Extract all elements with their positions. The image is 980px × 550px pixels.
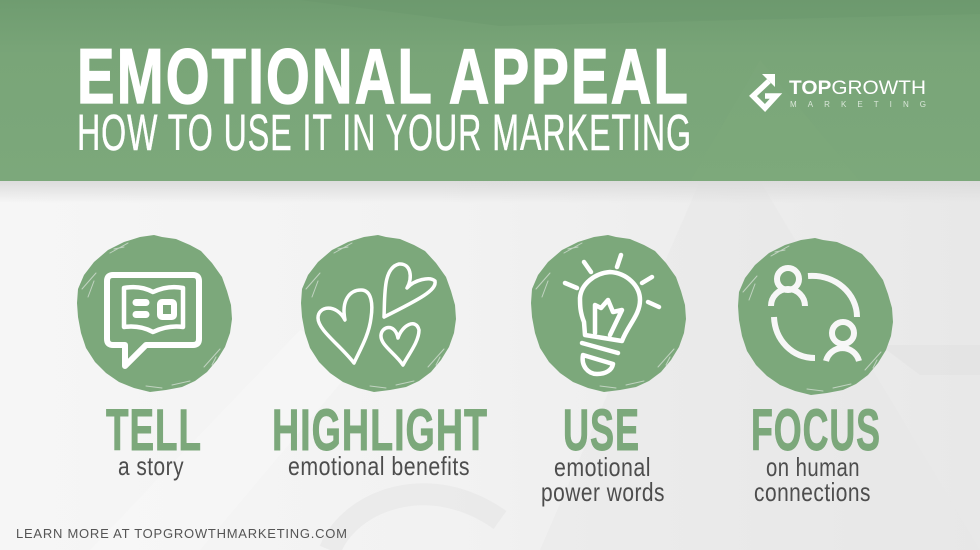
panel: tell a story [77,235,232,481]
caption: power words [541,477,665,507]
icon: connected people [771,268,859,361]
heading: HIGHLIGHT [272,398,488,463]
title: EMOTIONAL APPEAL [77,32,690,120]
caption: a story [118,451,184,481]
caption: on human [766,452,860,482]
logo wordmark: TOPGROWTH [789,78,926,99]
logo: Top Growth Marketing [753,74,926,109]
caption: connections [754,477,871,507]
badge circle [738,238,893,395]
heading: TELL [106,398,202,463]
heading: FOCUS [751,398,881,463]
panel: focus on human connections [738,238,893,507]
panel: highlight emotional benefits [272,235,488,481]
icon: three hearts [318,264,435,365]
icon: speech bubble with book [107,275,199,366]
heading: USE [563,398,640,463]
icon: light bulb [565,255,659,374]
badge circle [301,235,456,392]
footer link text: LEARN MORE AT TOPGROWTHMARKETING.COM [16,526,347,541]
caption: emotional benefits [288,451,470,481]
caption: emotional [554,452,651,482]
icon: logo arrow [753,74,776,108]
badge circle [531,235,686,392]
badge circle [77,235,232,392]
header band [0,0,980,181]
panel: use emotional power words [531,235,686,507]
logo tagline: MARKETING [790,100,926,109]
